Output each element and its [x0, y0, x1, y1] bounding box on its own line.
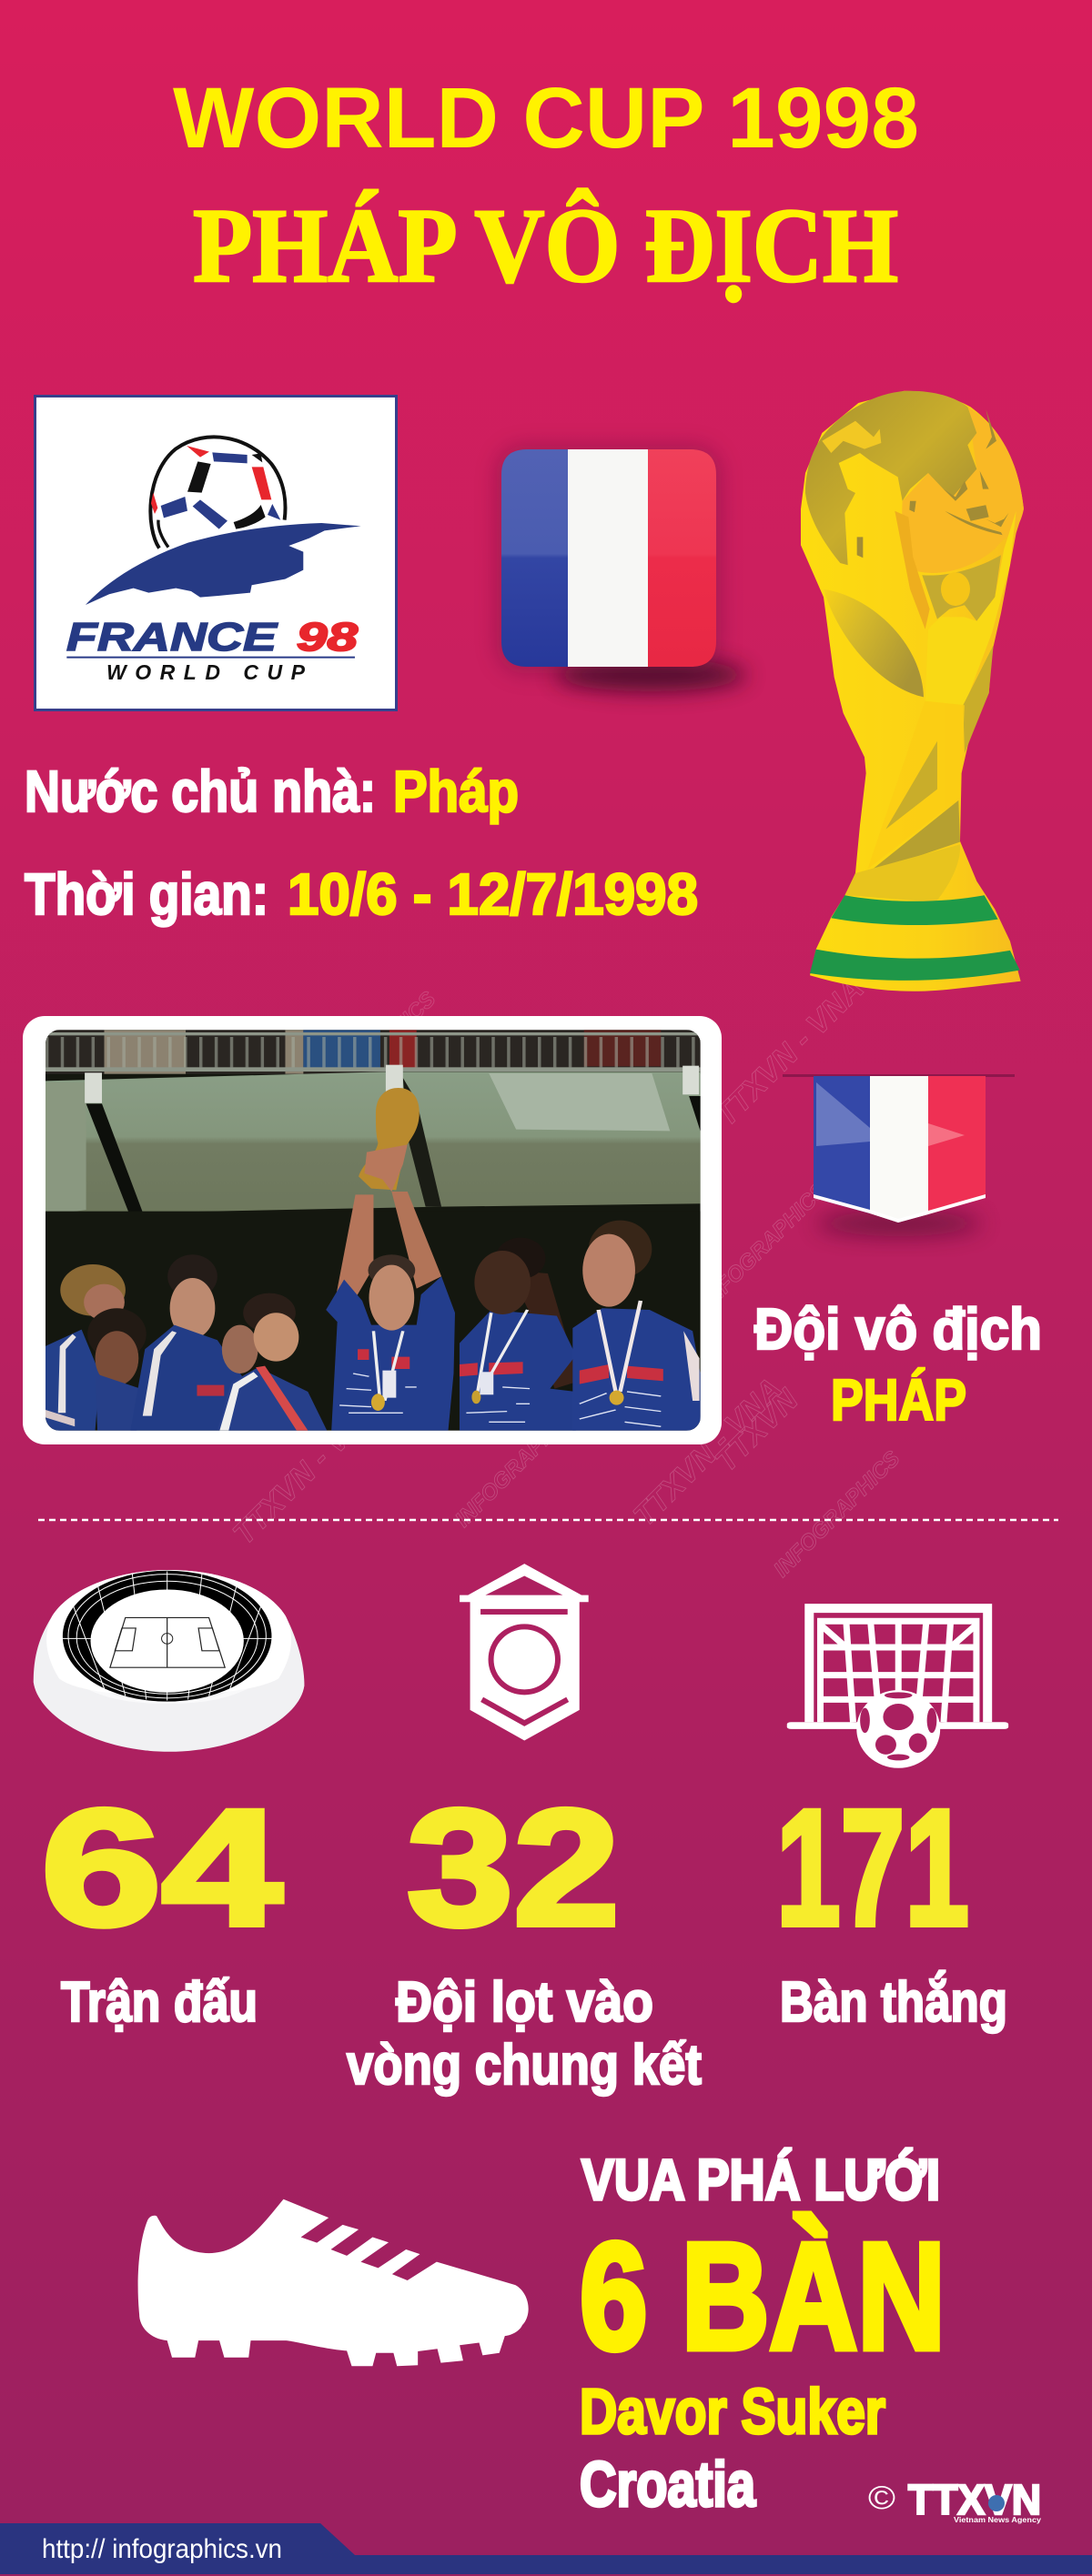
footer bar: http:// infographics.vn: [42, 2534, 282, 2564]
stat: 32 teams: [347, 1775, 702, 2097]
champion label: [754, 1296, 1042, 1433]
watermarks: [227, 971, 905, 1582]
icon: football boot: [138, 2199, 529, 2366]
dates line: 10/6 - 12/7/1998: [288, 861, 698, 927]
watermarks: INFOGRAPHICS: [305, 987, 440, 1122]
stat: 64 matches: [41, 1775, 282, 2034]
icon: France flag glossy square: [497, 446, 746, 691]
icon: goal and ball: [787, 1608, 1008, 1768]
host country line: Pháp: [393, 759, 519, 824]
icon: pennant: [460, 1564, 589, 1741]
stat: 171 goals: 171: [776, 1775, 969, 1960]
watermarks: INFOGRAPHICS: [450, 1396, 586, 1532]
watermarks: TTXVN: [709, 1382, 805, 1479]
logo: France 98: WORLD CUP: [106, 660, 306, 684]
top scorer block: 6 BÀN: [580, 2212, 945, 2381]
watermarks: TTXVN - VNA: [627, 1372, 789, 1534]
dates line: [25, 861, 698, 927]
icon: World Cup trophy: [801, 391, 1024, 991]
stat: 32 teams: 32: [407, 1775, 620, 1960]
logo: TTXVN: Vietnam News Agency: [954, 2516, 1042, 2524]
stat: 32 teams: vòng chung kết: [347, 2034, 702, 2097]
host country line: Nước chủ nhà:: [25, 759, 376, 824]
stat: 171 goals: Bàn thắng: [780, 1971, 1007, 2034]
logo: France 98: [35, 397, 397, 709]
watermarks: INFOGRAPHICS: [769, 1446, 905, 1582]
watermarks: TTXVN - VNA: [709, 971, 871, 1133]
logo: TTXVN: TTXVN: [908, 2476, 1041, 2523]
stat: 64 matches: Trận đấu: [61, 1971, 258, 2034]
photo: French team lifting the trophy: [23, 1016, 722, 1444]
footer bar: [0, 2523, 1092, 2574]
top scorer block: Croatia: [580, 2449, 756, 2520]
watermarks: TTXVN - VNA: [227, 1390, 389, 1552]
stat: 32 teams: Đội lọt vào: [396, 1971, 653, 2034]
top scorer block: [580, 2148, 945, 2520]
icon: stadium: [34, 1570, 304, 1752]
champion label: Đội vô địch: [754, 1296, 1042, 1362]
logo: France 98: FRANCE: [66, 615, 278, 659]
title line 1: WORLD CUP 1998: [173, 70, 919, 166]
top scorer block: Davor Suker: [580, 2376, 885, 2447]
champion label: PHÁP: [831, 1367, 966, 1433]
stat: 171 goals: [776, 1775, 1007, 2034]
logo: France 98: 98: [297, 615, 359, 659]
dates line: Thời gian:: [25, 861, 268, 927]
logo: TTXVN: ©: [868, 2479, 895, 2516]
icon: France shield pennant: [783, 1074, 1015, 1236]
stat: 64 matches: 64: [41, 1775, 282, 1960]
top scorer block: VUA PHÁ LƯỚI: [581, 2148, 940, 2212]
title line 2: PHÁP VÔ ĐỊCH: [193, 187, 898, 305]
watermarks: INFOGRAPHICS: [696, 1178, 832, 1313]
